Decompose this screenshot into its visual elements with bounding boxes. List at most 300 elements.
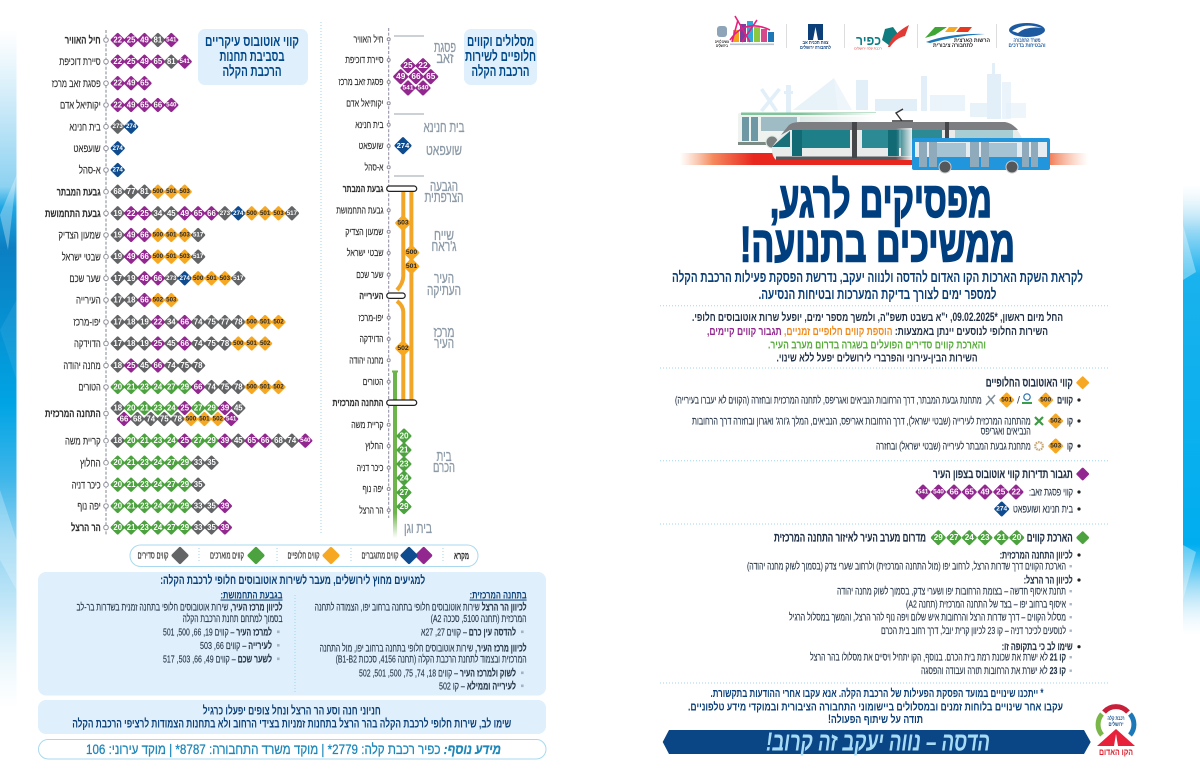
row: קריית משה: 540 (300, 437, 311, 444)
row: הדוידקה: 25 (154, 339, 163, 348)
neighbourhood labels: בית חנינא (424, 119, 465, 136)
row: קריית משה: 24 (167, 436, 176, 445)
row: א-סהל (79, 162, 125, 178)
row: שמעון הצדיק (58, 227, 206, 243)
section: alternative bus lines: קו (1067, 416, 1073, 428)
row: יקותיאל אדם: 540 (166, 102, 177, 108)
section: increased frequency in northern city: 22 (1011, 487, 1021, 497)
row: התחנה המרכזית: 27 (194, 404, 202, 412)
row: הדוידקה: 18 (127, 339, 136, 348)
row: החלוץ: 27 (167, 458, 176, 467)
row: יקותיאל אדם: 66 (154, 100, 163, 110)
row: סיירת דוכיפת: 65 (154, 57, 163, 66)
heading box: main bus lines: קווי אוטובוס עיקריים (205, 34, 299, 50)
row: החלוץ: 35 (207, 458, 216, 467)
skyline (760, 63, 1026, 119)
row: התחנה המרכזית: 21 (140, 404, 149, 412)
section icon: purple diamond (1076, 467, 1090, 481)
row: שמעון הצדיק: שמעון הצדיק (58, 230, 101, 242)
row: כיכר דניה: 23 (140, 480, 149, 489)
section: increased frequency in northern city: תגבור תדירות קווי אוטובוס בצפון העיר (933, 467, 1073, 481)
station names: חיל האוויר (354, 34, 384, 46)
column: Givat HaTachmoshet: בסמוך למתחם תחנת הרכבת הקלה (182, 613, 282, 625)
station names: שבטי ישראל (347, 247, 384, 259)
row: הדוידקה: 78 (221, 339, 230, 348)
row: קריית משה: 21 (140, 436, 149, 445)
section: extended lines to central station area: מסלול הקווים – דרך שדרות הרצל והרחובות איש שלום ויפה נוף להר הרצל, והמשך במסלול הרגיל (789, 612, 1066, 624)
row: גבעת התחמושת: 65 (194, 209, 203, 218)
green line badges: 29 (399, 502, 409, 511)
section: extended lines to central station area (747, 530, 1090, 677)
row: שבטי ישראל: 517 (193, 253, 204, 260)
row: העירייה: 66 (140, 296, 149, 304)
row: התחנה המרכזית: 39 (221, 404, 230, 412)
row: מחנה יהודה: 74 (167, 361, 176, 370)
station names: החלוץ (365, 440, 384, 452)
row: יפה נוף: 33 (194, 502, 203, 510)
row: יקותיאל אדם (60, 97, 179, 113)
row: יפו-מרכז: 77 (221, 318, 229, 326)
logo: jerusalem municipality colourful (715, 16, 774, 48)
row: גבעת התחמושת: 22 (127, 209, 136, 218)
row: הטורים: 27 (167, 382, 176, 392)
purple reinforced lines cluster (393, 58, 439, 96)
row: הטורים: 29 (180, 382, 190, 392)
row: הדוידקה (74, 336, 273, 351)
row: הדוידקה: 74 (194, 339, 203, 348)
blue bus (912, 138, 1050, 173)
row: קריית משה: 74 (288, 436, 297, 445)
orange line badges: 502 (397, 345, 409, 352)
row: גבעת התחמושת: 19 (113, 209, 123, 218)
row: יפו-מרכז: 34 (167, 318, 176, 326)
row: שועפאט: 274 (113, 145, 123, 152)
footer note: עקבו אחר שינויים בלוחות זמנים ובמסלולים ביישומוני התחבורה הציבורית ובמוקדי מידע טלפוניים. (688, 700, 1063, 714)
row: מחנה יהודה (63, 358, 206, 373)
section: extended lines to central station area: 23 (980, 533, 990, 542)
row: הר הרצל: 20 (113, 523, 123, 532)
row: התחנה המרכזית: 75 (160, 414, 169, 424)
row: הדוידקה: 45 (167, 339, 176, 348)
row: גבעת התחמושת: 45 (167, 209, 176, 218)
row: כיכר דניה: 27 (167, 480, 176, 489)
row: כיכר דניה: 35 (194, 480, 203, 489)
road (680, 153, 1088, 165)
panel: main bus lines by station (45, 29, 313, 535)
row: הדוידקה: 17 (113, 339, 122, 348)
row: הר הרצל: 24 (154, 523, 163, 532)
main title (740, 172, 1015, 272)
station names: שער שכם (356, 270, 384, 281)
row: גבעת התחמושת (45, 206, 300, 221)
row: הדוידקה: 502 (260, 340, 271, 347)
row: התחנה המרכזית: 24 (167, 404, 176, 412)
column: Givat HaTachmoshet: למרכז העיר – קווים 19, 66, 500, 501 (163, 626, 272, 638)
row: שבטי ישראל: 501 (166, 253, 177, 260)
neighbourhood labels: בית וגן (404, 520, 432, 537)
row: שער שכם: 66 (154, 274, 163, 283)
section icon: green diamond (1076, 531, 1090, 545)
row: יפה נוף: יפה נוף (77, 501, 101, 513)
section: alternative bus lines: 502 (1050, 417, 1062, 425)
logo: red line: רכבת קלה (1108, 715, 1124, 722)
station names: יפה נוף (362, 484, 384, 495)
row: הטורים: 74 (207, 382, 216, 392)
row: התחנה המרכזית: 502 (213, 416, 224, 422)
orange line badges (395, 215, 420, 357)
row: מחנה יהודה: 75 (180, 361, 190, 370)
row: פסגת זאב מרכז: 22 (113, 79, 123, 88)
row: גבעת התחמושת: 273 (220, 210, 231, 217)
row: קריית משה: 39 (221, 436, 230, 445)
section: extended lines to central station area: 29 (934, 533, 943, 542)
section: alternative bus lines (675, 376, 1090, 454)
row: שבטי ישראל: 503 (180, 253, 190, 260)
row: שער שכם: 19 (127, 274, 136, 283)
row: הטורים: הטורים (78, 382, 101, 394)
section: alternative bus lines: קווים (1057, 394, 1073, 406)
station names: שמעון הצדיק (345, 227, 384, 238)
row: הטורים: 23 (140, 382, 149, 392)
row: שער שכם: 517 (233, 275, 244, 282)
heading box: main bus lines: בסביבת תחנות (220, 49, 284, 65)
orange alternative lines route (397, 188, 411, 403)
column: Givat HaTachmoshet: לעירייה – קווים 66, 503 (200, 640, 272, 652)
row: התחנה המרכזית: 45 (234, 404, 243, 412)
legend: קווים סדירים (138, 550, 169, 562)
heading box: alternative routes: חלופיים לשירות (465, 49, 536, 65)
section: extended lines to central station area: איסוף ברחוב יפו – בצד של התחנה המרכזית (תחנה A2) (906, 599, 1066, 611)
neighbourhood labels: ג'ראח (432, 238, 456, 255)
row: שמעון הצדיק: 501 (166, 232, 177, 238)
heading box: alternative routes: מסלולים וקווים (467, 34, 534, 50)
column: central bus station: לשוק ולמרכז העיר – קווים 18, 74, 75, 500, 501, 502 (359, 668, 516, 680)
row: חיל האוויר (65, 32, 179, 48)
row: הדוידקה: הדוידקה (74, 338, 101, 350)
panel: arrivals from outside Jerusalem (38, 572, 546, 696)
section: extended lines to central station area: לכיוון התחנה המרכזית: (1000, 550, 1073, 562)
row: גבעת התחמושת: 517 (287, 210, 298, 217)
row: שמעון הצדיק: 503 (180, 232, 190, 238)
row: הדוידקה: 500 (233, 340, 244, 347)
row: שועפאט: שועפאט (73, 143, 101, 155)
left decorative blue strip (0, 30, 16, 710)
column: Givat HaTachmoshet: בגבעת התחמושת: (220, 590, 283, 602)
row: בית חנינא: בית חנינא (69, 121, 101, 133)
row: פסגת זאב מרכז: 65 (140, 79, 149, 88)
panel: park and ride notice: שימו לב, שירות חלופי לרכבת הקלה בהר הרצל בתחנות זמניות בצידי הרחוב ולא בתחנות הצמודות לרציפי הרכבת הקלה (72, 716, 511, 730)
section: extended lines to central station area: הארכת קווים (1027, 531, 1073, 545)
row: הטורים: 501 (260, 384, 271, 390)
row: שבטי ישראל: 500 (153, 253, 164, 260)
station names: גבעת התחמושת (336, 206, 384, 216)
legend (130, 545, 478, 566)
subtitle (672, 269, 1083, 303)
section: increased frequency in northern city: 274 (996, 505, 1008, 513)
row: שער שכם: 17 (113, 274, 122, 283)
logo: kavim kfir: רכבת קלה ירושלים (854, 46, 882, 50)
row: הר הרצל: 39 (221, 523, 230, 532)
row: גבעת התחמושת: 25 (140, 209, 149, 218)
row: הטורים: 20 (113, 382, 123, 392)
row: יפו-מרכז: 75 (207, 318, 216, 326)
logo: national public transport authority: הרשות הארצית (954, 38, 990, 44)
legend: קווים מוארכים (210, 550, 244, 562)
tram (772, 109, 1023, 160)
row: סיירת דוכיפת (59, 54, 192, 69)
row: יפו-מרכז: יפו-מרכז (73, 317, 101, 329)
row: התחנה המרכזית (45, 400, 246, 427)
panel: alternative routes map (332, 28, 537, 538)
section: increased frequency in northern city (915, 467, 1090, 517)
row: יפו-מרכז: 19 (140, 318, 149, 326)
row: קריית משה: 20 (127, 436, 136, 445)
legend: קווים חלופיים (288, 550, 320, 562)
row: קריית משה: 18 (113, 436, 123, 445)
row: הדוידקה: 66 (180, 339, 190, 348)
row: גבעת התחמושת: 66 (207, 209, 216, 218)
column: central bus station: המרכזית (תחנה 5100, סככה A2) (431, 613, 527, 625)
section: extended lines to central station area: תחנת איסוף חדשה – בצומת הרחובות יפו ושערי צדק, בסמוך לשוק מחנה יהודה (837, 586, 1066, 598)
green line badges: 23 (399, 459, 409, 469)
section: increased frequency in northern city: 49 (980, 487, 990, 497)
heading box: main bus lines: הרכבת הקלה (222, 64, 282, 80)
row: שבטי ישראל (62, 249, 206, 264)
row: גבעת המבתר: 68 (113, 187, 123, 196)
neighbourhood labels: מרכז (434, 324, 454, 341)
green line badges: 27 (399, 488, 409, 497)
row: גבעת התחמושת: 501 (260, 210, 271, 217)
section: extended lines to central station area: לנוסעים לכיכר דניה – קו 23 לכיוון קרית יובל, דרך רחוב בית הכרם (881, 625, 1066, 637)
row: שבטי ישראל: 19 (113, 252, 123, 261)
row: שבטי ישראל: 66 (140, 252, 149, 261)
row: העירייה: העירייה (76, 295, 101, 307)
row: התחנה המרכזית: 78 (173, 414, 183, 424)
row: יפו-מרכז (73, 314, 286, 330)
station names (332, 34, 390, 516)
logo: ministry of transport: משרד התחבורה (1014, 38, 1040, 44)
row: גבעת התחמושת: 49 (180, 209, 190, 218)
row: הטורים: 75 (221, 382, 230, 392)
column: Givat HaTachmoshet: לשער שכם – קווים 49, 66, 503, 517 (163, 654, 272, 666)
row: יפו-מרכז: 66 (180, 318, 190, 326)
row: יקותיאל אדם: יקותיאל אדם (60, 99, 101, 112)
heading box: alternative routes (464, 29, 537, 85)
logo: red line: ירושלים (1108, 721, 1124, 728)
purple reinforced lines cluster: 65 (426, 72, 436, 81)
row: שער שכם: 274 (180, 275, 190, 282)
row: הדוידקה: 501 (247, 340, 257, 347)
row: קריית משה: 27 (194, 436, 202, 445)
row: הטורים: 78 (234, 382, 243, 392)
logo: jerusalem transport master plan (800, 24, 831, 51)
station pills (387, 186, 417, 405)
row: שער שכם: 503 (220, 275, 231, 282)
station names: שועפאט (358, 141, 384, 152)
row: שמעון הצדיק: 500 (153, 232, 164, 238)
row: קריית משה: 65 (247, 436, 257, 445)
row: קריית משה: 66 (261, 436, 270, 445)
row: הר הרצל: 21 (127, 523, 136, 532)
panel: park and ride notice: חניוני חנה וסע הר הרצל ונחל צופים יפעלו כרגיל (203, 704, 381, 718)
panel: more information phone numbers: מידע נוסף: כפיר רכבת קלה: 2779* | מוקד משרד התחבורה: 8787* | מוקד עירוני: 106 (86, 741, 501, 757)
logos row (715, 16, 1046, 51)
station names: כיכר דניה (357, 463, 384, 474)
green line badges (396, 428, 412, 515)
row: החלוץ: 33 (194, 458, 203, 467)
logo: national public transport authority (925, 27, 990, 49)
row: קריית משה: 29 (207, 436, 216, 445)
column: central bus station: להדסה עין כרם – קווים 27, 27א (421, 626, 516, 638)
row: גבעת המבתר: 501 (166, 188, 177, 195)
row: שער שכם: 501 (206, 275, 217, 282)
row: יקותיאל אדם: 49 (127, 100, 136, 110)
neighbourhood labels: זאב (436, 50, 454, 67)
neighbourhood labels: פסגת (434, 39, 456, 56)
purple reinforced lines cluster: 49 (396, 72, 406, 81)
row: התחנה המרכזית: 501 (199, 416, 210, 422)
row: כיכר דניה: 21 (127, 480, 136, 489)
row: סיירת דוכיפת: 81 (167, 57, 176, 66)
row: יפה נוף (77, 498, 233, 514)
section: alternative bus lines: הנביאים ואגריפס (981, 426, 1031, 438)
legend: מקרא (454, 551, 469, 562)
intro text: והארכת קווים סדירים הפועלים בשגרה בדרום מערב העיר. (768, 338, 986, 352)
row: הטורים: 21 (127, 382, 136, 392)
row: התחנה המרכזית: 500 (186, 416, 197, 422)
row: שער שכם (69, 271, 246, 286)
row: א-סהל: א-סהל (79, 164, 101, 177)
section: alternative bus lines: קווי האוטובוס החלופיים (986, 376, 1073, 390)
row: יפה נוף: 23 (140, 502, 149, 510)
row: כיכר דניה: כיכר דניה (72, 479, 101, 491)
section: increased frequency in northern city: בית חנינא ושועפאט (1013, 504, 1073, 516)
footer note (688, 687, 1063, 726)
row: העירייה: 502 (153, 296, 164, 304)
green bus (738, 112, 876, 148)
row: קריית משה: קריית משה (65, 435, 101, 447)
section: extended lines to central station area: לכיוון הר הרצל: (1024, 574, 1073, 586)
row: מחנה יהודה: מחנה יהודה (63, 360, 101, 372)
row: התחנה המרכזית: 18 (113, 404, 123, 412)
section: alternative bus lines: מהתחנה המרכזית לעירייה (שבטי ישראל), דרך הרחובות אגריפס, הנביאים, המלך ג'ורג' ואגרון ובחזרה דרך הרחובות (692, 416, 1031, 428)
logo: kavim kfir (854, 25, 909, 50)
neighbourhood labels: העיר (434, 270, 454, 287)
station names: קריית משה (351, 420, 384, 431)
logo: jerusalem transport master plan: צוות תכנית אב (802, 40, 828, 46)
main title: ממשיכים בתנועה! (740, 216, 1015, 272)
row: החלוץ: 21 (127, 458, 136, 467)
row: העירייה (76, 292, 179, 308)
row: כיכר דניה: 29 (180, 480, 190, 489)
orange line badges: 501 (406, 263, 417, 270)
subtitle: למספר ימים לצורך בדיקת המערכות ובטיחות הנסיעה. (758, 286, 996, 303)
column: central bus station: המרכזית ובצמוד לתחנת הרכבת הקלה (תחנה 4156, סככות B1-B2) (336, 654, 527, 666)
section: increased frequency in northern city: 66 (949, 487, 959, 497)
row: חיל האוויר: 25 (127, 36, 136, 44)
row: העירייה: 18 (127, 296, 136, 304)
heading box: alternative routes: הרכבת הקלה (472, 64, 530, 80)
row: החלוץ: 20 (113, 458, 123, 467)
station names: סיירת דוכיפת (345, 55, 384, 66)
section: alternative bus lines: 503 (1050, 442, 1062, 450)
row: החלוץ (80, 455, 219, 470)
section: alternative bus lines: מתחנת גבעת המבתר, דרך הרחובות הנביאים ואגריפס, לתחנה המרכזית ובחזרה (הקווים לא יעברו בעירייה) (675, 394, 982, 406)
row: יפו-מרכז: 78 (234, 318, 243, 326)
logo: red line: הקו האדום (1099, 747, 1133, 757)
green line badges: 21 (399, 445, 409, 455)
intro text: השירות החלופי לנוסעים יינתן באמצעות: הוספת קווים חלופיים זמניים, תגבור קווים קיימים, (707, 325, 1048, 338)
row: בית חנינא: 273 (113, 123, 123, 130)
section: extended lines to central station area: 21 (997, 533, 1006, 542)
logo: red line (1097, 707, 1135, 757)
row: קריית משה: 68 (274, 436, 283, 445)
column: central bus station: לעירייה וממילא – קו 502 (439, 680, 516, 692)
row: יקותיאל אדם: 65 (140, 100, 149, 110)
row: יפו-מרכז: 500 (247, 318, 257, 326)
row: חיל האוויר: 541 (166, 36, 177, 44)
row: הדוידקה: 19 (140, 339, 149, 348)
purple reinforced lines cluster: 66 (411, 72, 421, 81)
row: יפה נוף: 24 (154, 502, 163, 510)
row: שמעון הצדיק: 19 (113, 230, 123, 240)
row: הר הרצל: 23 (140, 523, 149, 532)
section: extended lines to central station area: 27 (949, 533, 959, 542)
section: alternative bus lines: / (1017, 394, 1020, 406)
neighbourhood labels: העתיקה (427, 282, 461, 299)
purple reinforced lines cluster: 540 (418, 84, 429, 92)
row: גבעת התחמושת: 503 (273, 210, 284, 217)
row: בית חנינא (69, 119, 139, 134)
row: הר הרצל: 35 (207, 523, 216, 532)
row: החלוץ: 24 (154, 458, 163, 467)
column: central bus station (315, 590, 527, 692)
row: יפו-מרכז: 74 (194, 318, 203, 326)
neighbourhood labels: בית (436, 448, 452, 465)
illustration: skyline tram and buses (680, 63, 1088, 173)
column: Givat HaTachmoshet (77, 590, 283, 666)
row: הטורים: 66 (194, 382, 203, 392)
logo: ministry of transport: והבטיחות בדרכים (1008, 43, 1046, 49)
section: increased frequency in northern city: קווי פסגת זאב: (1029, 486, 1073, 498)
row: פסגת זאב מרכז: 49 (127, 79, 136, 88)
panel title: למגיעים מחוץ לירושלים, מעבר לשירות אוטובוסים חלופי לרכבת הקלה: (160, 573, 425, 587)
intro text: השירות הבין-עירוני והפרברי לירושלים יפעל ללא שינוי. (776, 352, 978, 364)
row: התחנה המרכזית: התחנה המרכזית (45, 408, 101, 420)
row: יפו-מרכז: 18 (127, 318, 136, 326)
row: חיל האוויר: 81 (154, 36, 163, 44)
neighbourhood labels: הכרם (433, 459, 455, 476)
neighbourhood labels (394, 36, 465, 537)
row: כיכר דניה (72, 477, 206, 492)
row: הטורים (78, 379, 286, 395)
logo: ministry of transport (1008, 23, 1046, 49)
neighbourhood labels: הצרפתית (424, 189, 464, 206)
row: חיל האוויר: 49 (140, 36, 149, 44)
row: סיירת דוכיפת: סיירת דוכיפת (59, 56, 101, 68)
row: סיירת דוכיפת: 25 (127, 57, 136, 66)
neighbourhood labels: הגבעה (430, 178, 458, 195)
green line badges: 24 (399, 473, 409, 483)
station names: התחנה המרכזית (332, 398, 384, 409)
neighbourhood labels: שייח (434, 227, 454, 244)
section: extended lines to central station area: 20 (1012, 533, 1022, 542)
legend: קווים מתוגברים (362, 550, 399, 562)
column: central bus station: לכיוון מרכז העיר, שירות אוטובוסים חלופי בתחנה ברחוב יפו, מול התחנה (320, 642, 527, 654)
row: התחנה המרכזית: 68 (133, 414, 142, 424)
section: increased frequency in northern city: 541 (918, 488, 929, 496)
intro text: החל מיום ראשון, *09.02.2025, י"א בשבט תשפ"ה, ולמשך מספר ימים, יופעל שרות אוטובוסים חלופי. (692, 311, 1063, 324)
